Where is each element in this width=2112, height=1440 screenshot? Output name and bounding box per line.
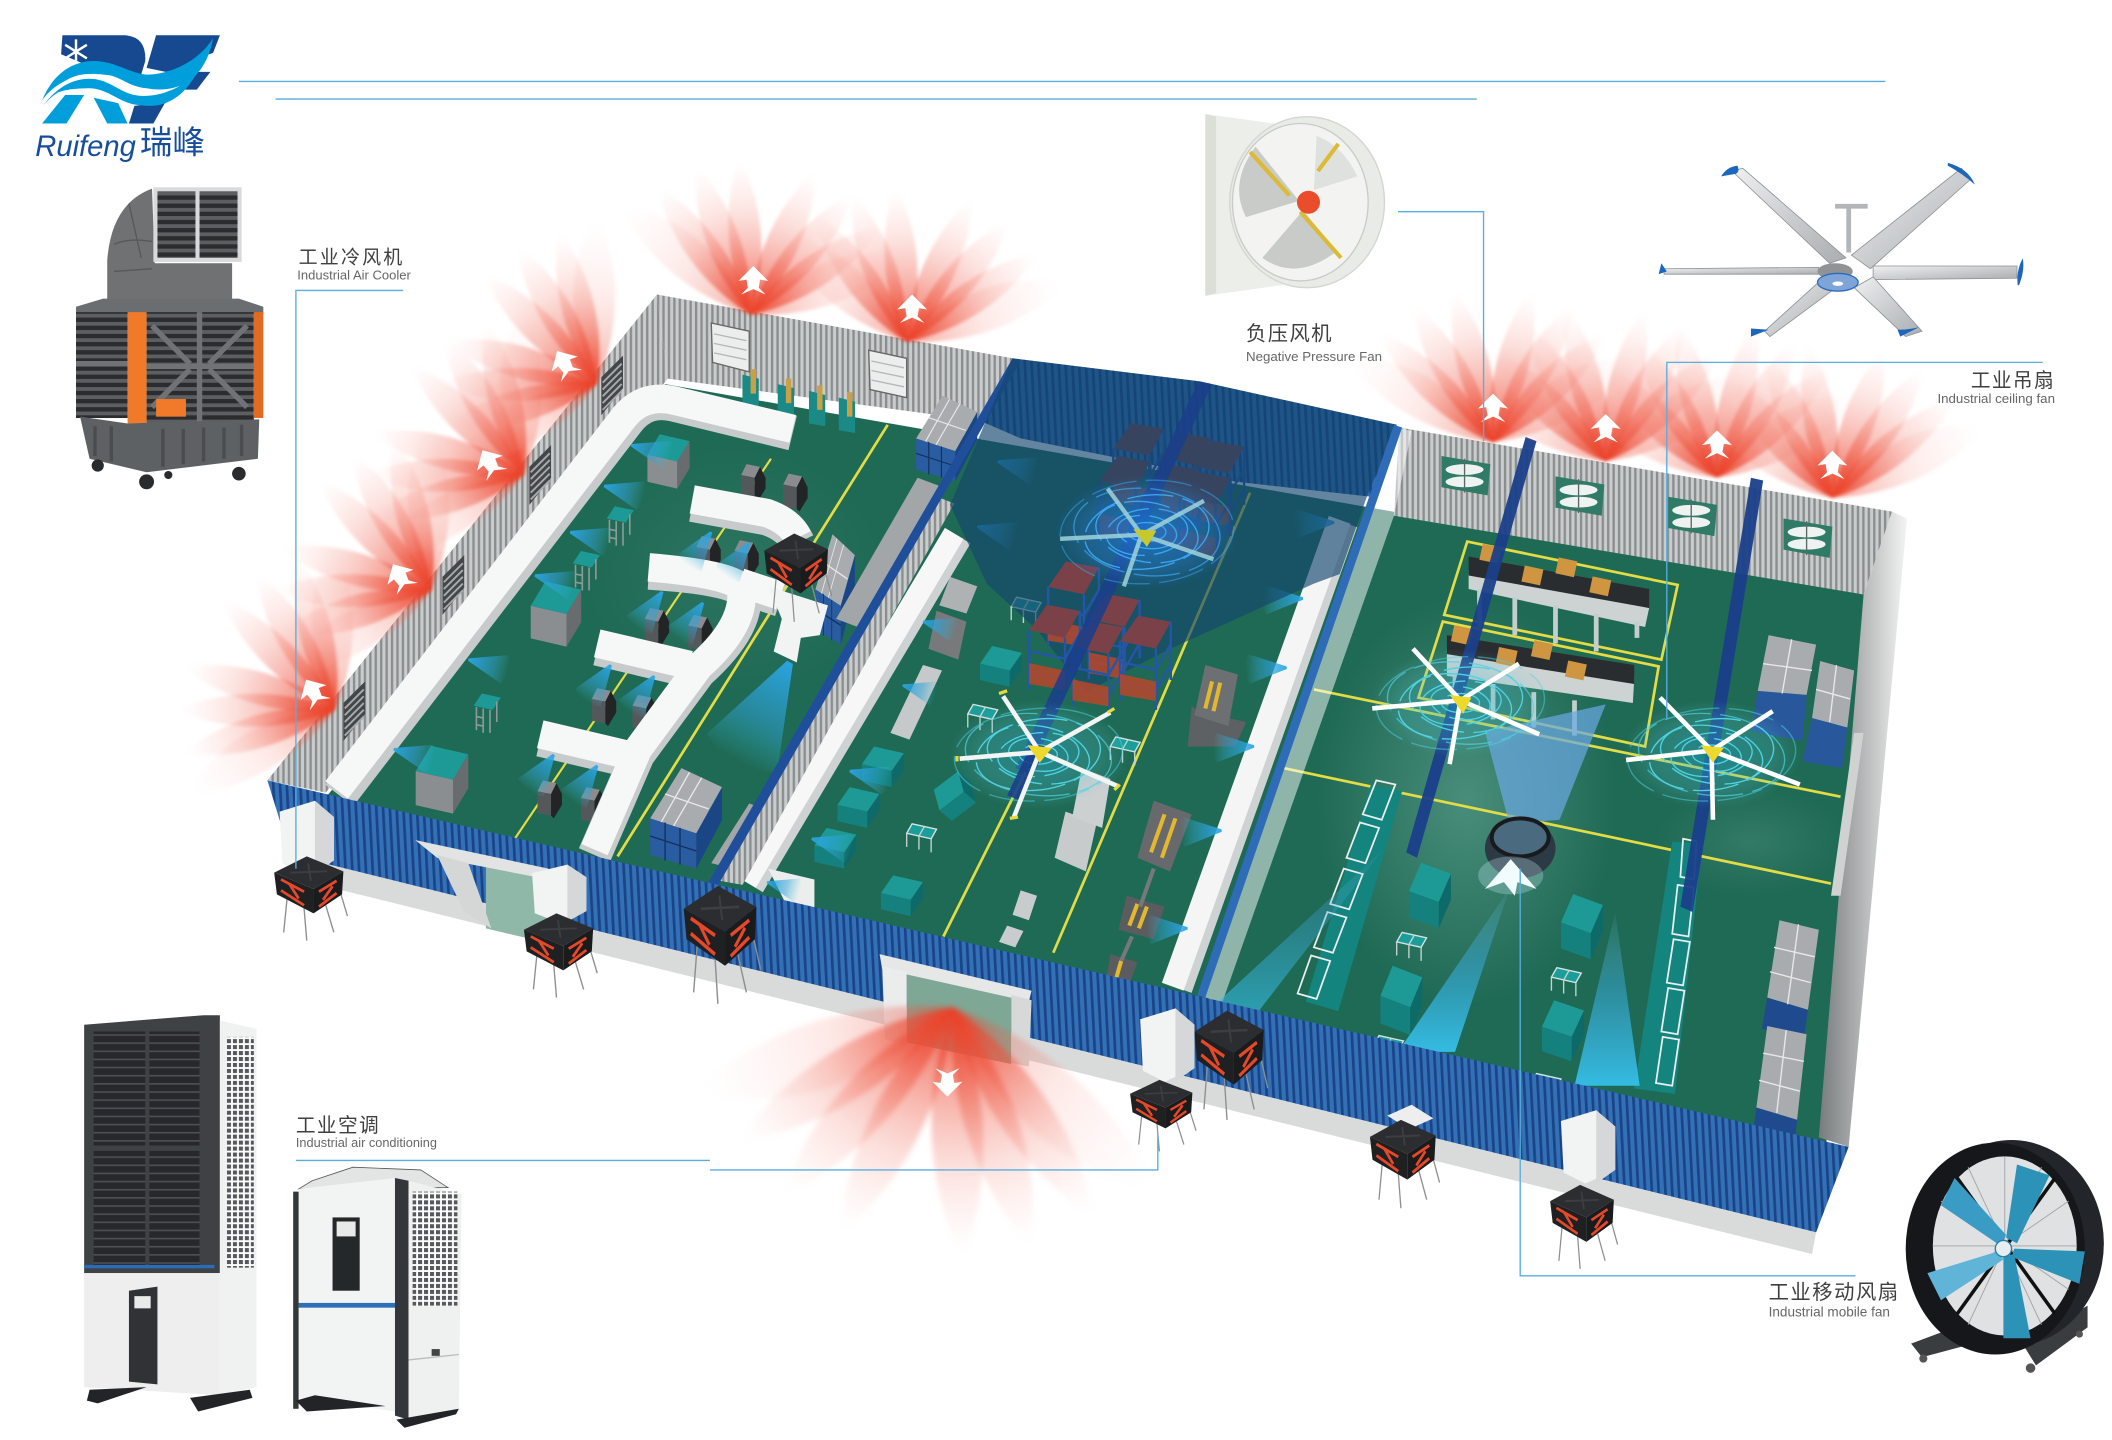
section 1 objects: machines and cabinets [416,434,808,825]
blue haze over back of section 2 [950,358,1397,692]
side with grille [220,1021,257,1395]
product: air cooler [76,187,263,489]
front wall base [290,855,1816,1254]
elbow duct [107,189,232,301]
back wall section 1 [657,295,1013,421]
hot air plumes: back wall [606,137,1992,511]
fan blades [1239,136,1357,269]
section 2 objects [814,577,1246,984]
product: negative pressure fan [1205,114,1384,296]
back wall section 2 [980,358,1397,497]
door 2 [880,954,1032,1067]
ceiling fan: section 3 right [1622,698,1801,820]
ceiling beams section 3 [1406,437,1763,912]
front wall [267,780,1849,1232]
control strip [333,1217,360,1291]
center hub [1995,1240,2012,1257]
label: negative pressure fan: 负压风机 [1246,323,1333,346]
factory building [267,295,1907,1269]
blue blade tips [1659,163,2023,337]
product: compact air conditioner [293,1167,461,1428]
header rule lines [239,81,1885,99]
casters [92,459,246,489]
caster wheels [1919,1331,2083,1373]
logo: Ruifeng [35,35,220,163]
exterior unit 2 [524,865,597,998]
grille [1933,1156,2077,1335]
label: air conditioning: 工业空调 [296,1115,380,1137]
right wall [1819,512,1907,1147]
section 1 main duct [337,399,793,795]
storage racks: front rows [1029,561,1171,715]
divider wall between section 2 and 3 [1197,425,1412,1004]
interior air cooler unit [764,534,832,622]
label: mobile fan [1769,1281,1900,1319]
hot air plume: front door [672,958,1182,1298]
blades [1927,1164,2085,1338]
feet [296,1395,459,1428]
ceiling fan: section 2 rear [1015,381,1239,774]
back wall vents [711,323,907,398]
exterior unit 6 [1370,1105,1440,1208]
label: ceiling fan: Industrial ceiling fan [1937,391,2055,406]
logo: Ruifeng: 瑞峰 [140,124,205,160]
door 1 [415,840,554,942]
label: air conditioning: Industrial air conditioning [296,1135,437,1150]
yellow spokes [1250,144,1341,258]
front panel [299,1178,395,1411]
front ring [1906,1143,2085,1354]
section 1 wall boards [742,369,855,433]
exterior unit 7 [1550,1110,1618,1269]
exterior unit 1 [274,801,347,941]
product: ceiling fan [1659,163,2023,337]
white plume arrows [293,266,1847,1097]
exterior unit 5 [1194,1011,1268,1120]
floor [323,384,1866,1154]
red hub [1297,191,1320,214]
section 3 air flow cones [1208,704,1640,1086]
product: mobile fan [1906,1140,2104,1373]
hub [1817,263,1853,280]
section 2 air flow cones [764,447,1335,944]
section 3 right racks [1751,635,1854,1147]
storage racks: rear rows [1100,423,1244,566]
back wall section 3 [1394,428,1892,594]
mobile fan on factory floor [1478,818,1555,896]
callout lines [296,212,2043,1276]
label: ceiling fan [1937,370,2055,406]
dark louver panel [84,1015,220,1273]
logo mark: RF [42,35,220,124]
label: air cooler [297,246,412,283]
divider wall between section 1 and 2 [709,358,1021,888]
blades [1664,168,2017,337]
hot air plumes: left wall [128,180,671,837]
right wall door [1831,733,1864,896]
cone and grille [1230,117,1384,288]
ceiling beam [1015,381,1212,774]
ceiling fan: section 3 left [1371,649,1550,764]
white base [84,1273,220,1395]
control strip [129,1287,157,1384]
label: ceiling fan: 工业吊扇 [1971,370,2055,392]
label: mobile fan: 工业移动风扇 [1769,1281,1900,1304]
section 2 divider ducts [747,520,1344,988]
section 3 conveyor lines [1447,544,1649,736]
corner pillar [395,1178,409,1420]
label: negative pressure fan: Negative Pressure Fan [1246,349,1382,364]
label: negative pressure fan [1246,323,1382,364]
logo wordmark: Ruifeng [35,131,136,163]
mount [1835,206,1868,252]
section 1 racks [650,396,977,869]
label: air conditioning [296,1115,437,1150]
top cover [299,1167,448,1189]
exterior unit 4 [1130,1008,1196,1151]
exterior unit 3 [684,886,761,1004]
label: mobile fan: Industrial mobile fan [1769,1304,1890,1319]
section 1 air flow cones [390,431,825,811]
section 3 teal boxes and stands [1374,863,1603,1102]
feet [87,1387,252,1411]
product: tall air conditioner [84,1015,257,1411]
label: air cooler: 工业冷风机 [299,246,404,268]
side with grille [409,1181,461,1420]
body [76,299,263,472]
label: air cooler: Industrial Air Cooler [297,268,412,283]
rear ring [1919,1140,2104,1346]
square housing [1205,114,1330,296]
yellow floor lines [482,425,1841,953]
louver head [153,187,242,262]
section 3 wall fan panels [1441,456,1832,558]
stand [1911,1306,2088,1365]
left wall [267,295,668,793]
section 3 long conveyors [1298,780,1702,1094]
ceiling fan: section 2 front [949,691,1128,818]
left wall louvres [343,356,623,741]
section 1 branch ducts [540,499,828,855]
